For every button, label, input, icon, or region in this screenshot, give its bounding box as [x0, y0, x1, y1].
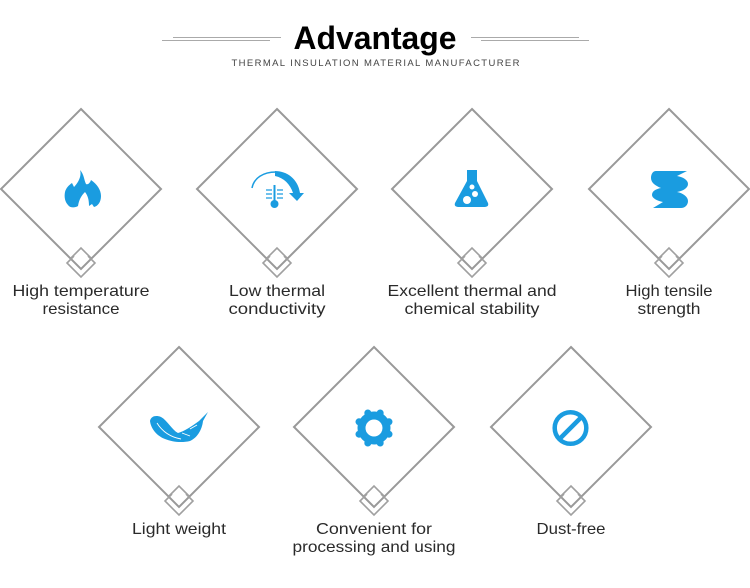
header: [162, 20, 589, 69]
panel: convenient for processing and using: [292, 347, 456, 556]
label: resistance: [42, 301, 120, 318]
panel: low thermal conductivity: [197, 109, 357, 318]
label: High temperature: [12, 283, 150, 300]
label: [228, 283, 326, 318]
label: Convenient for: [316, 521, 433, 538]
label: [292, 521, 456, 556]
panel: high temperature resistance: [1, 109, 161, 318]
label: [388, 283, 556, 318]
diamond frame: [392, 109, 552, 277]
icon: gear: [356, 410, 392, 446]
label: Light weight: [132, 521, 227, 538]
right title rule: [471, 38, 589, 40]
label: conductivity: [228, 301, 326, 318]
icon: feather: [150, 412, 208, 442]
panel: dust-free: [491, 347, 651, 538]
label: [12, 283, 150, 318]
diamond frame: [491, 347, 651, 515]
label: processing and using: [292, 539, 456, 556]
diamond frame: [589, 109, 749, 277]
icon: spring: [651, 171, 688, 208]
subtitle: THERMAL INSULATION MATERIAL MANUFACTURER: [232, 58, 520, 69]
diamond frame: [1, 109, 161, 277]
panel: excellent thermal and chemical stability: [388, 109, 556, 318]
icon: thermometer and arrow: [252, 171, 304, 208]
label: Excellent thermal and: [388, 283, 556, 300]
panel: light weight: [99, 347, 259, 538]
diamond frame: [99, 347, 259, 515]
label: Low thermal: [229, 283, 325, 300]
panel: high tensile strength: [589, 109, 749, 318]
icon: flask: [455, 170, 488, 207]
icon: flame: [65, 170, 101, 207]
label: strength: [638, 301, 700, 318]
left title rule: [162, 38, 281, 40]
diamond frame: [294, 347, 454, 515]
title: Advantage: [294, 20, 456, 56]
diamond frame: [197, 109, 357, 277]
label: Dust-free: [536, 521, 606, 538]
label: [626, 283, 713, 318]
label: chemical stability: [404, 301, 540, 318]
label: High tensile: [626, 283, 713, 300]
icon: prohibition sign: [555, 412, 586, 444]
